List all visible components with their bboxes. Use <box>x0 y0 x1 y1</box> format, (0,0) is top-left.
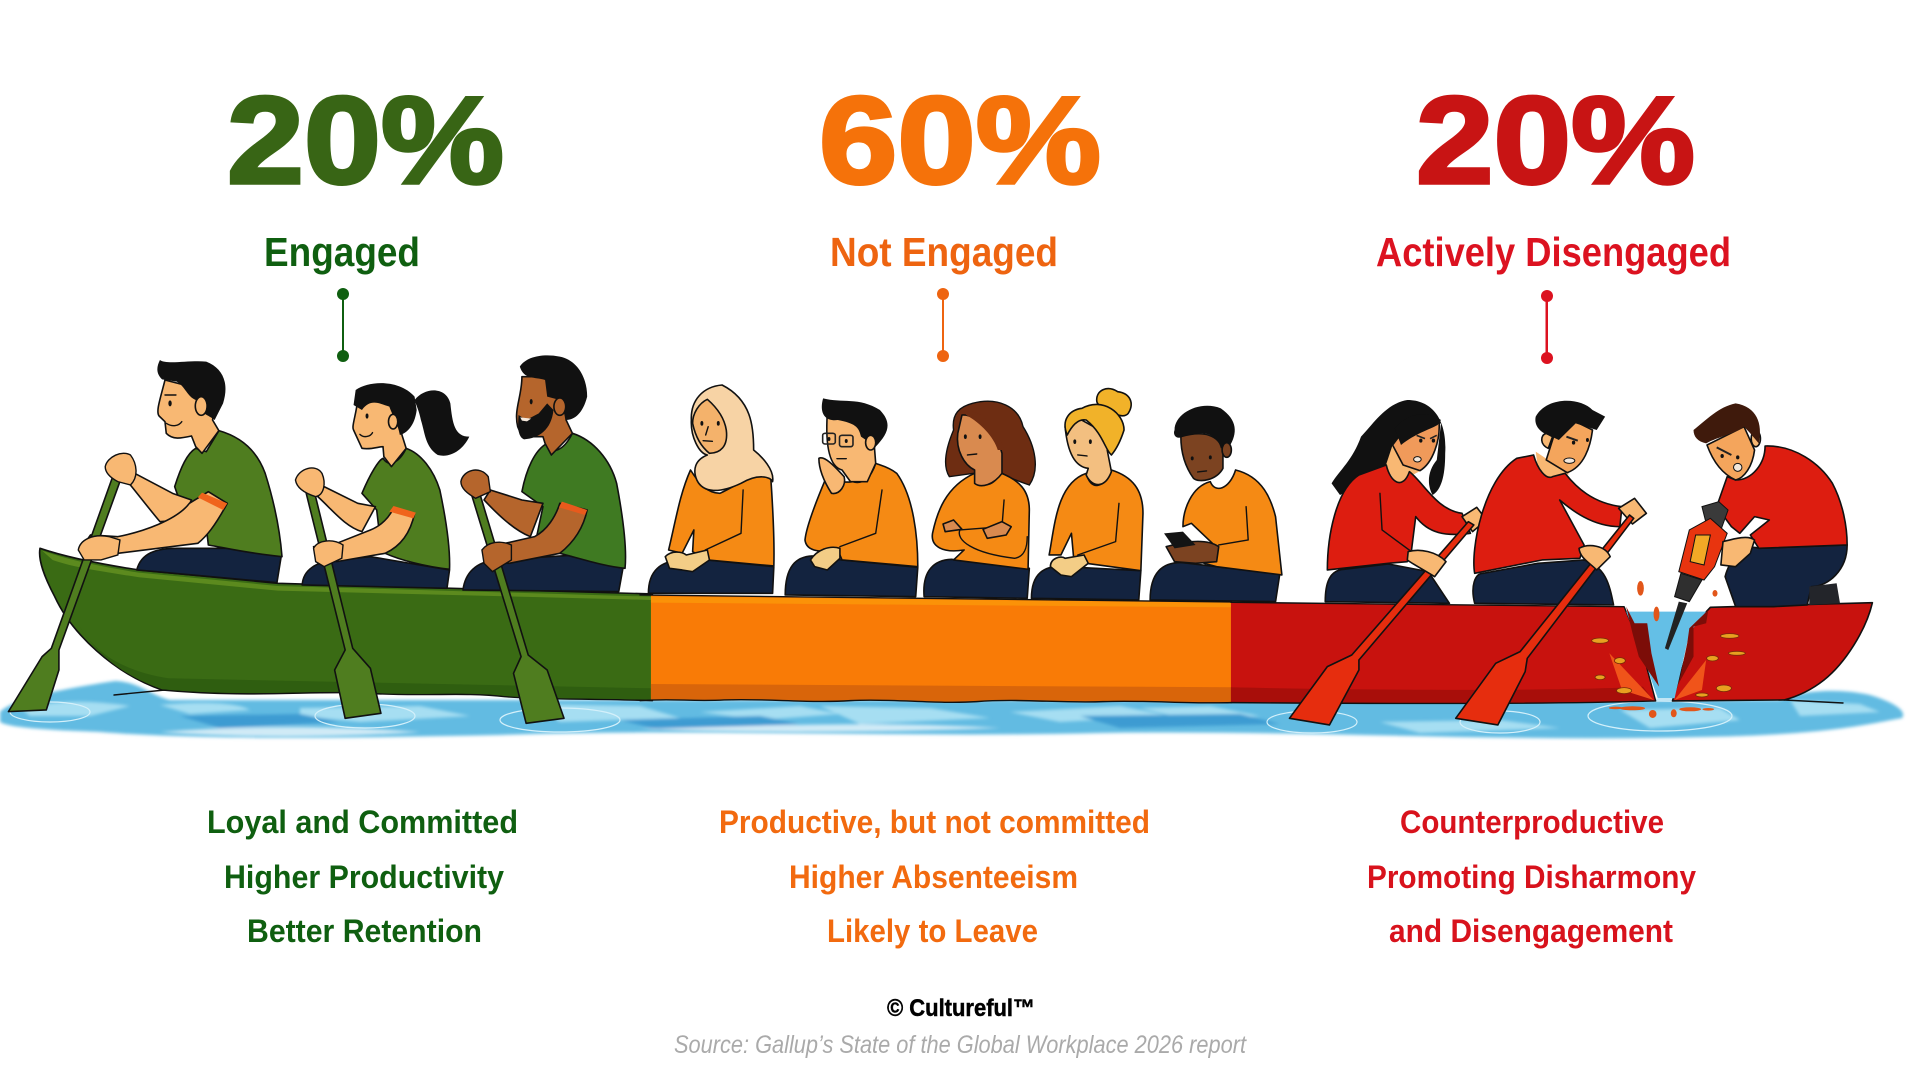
rower 3: engaged bearded man <box>463 355 626 592</box>
drill <box>1665 502 1728 650</box>
brand mark: © Cultureful™ <box>887 995 1035 1022</box>
text block: engaged traits: Higher Productivity <box>224 859 504 895</box>
person: woman in hijab, not engaged <box>648 385 774 593</box>
person: woman with curly hair, arms crossed, not engaged <box>924 401 1035 598</box>
text block: not engaged traits: Higher Absenteeism <box>789 859 1078 895</box>
red oars <box>1289 515 1634 725</box>
source note: Source: Gallup’s State of the Global Workplace 2026 report <box>674 1031 1247 1059</box>
stat: 60% not engaged: 60% <box>819 72 1101 210</box>
text block: engaged traits <box>207 804 518 949</box>
text block: not engaged traits: Likely to Leave <box>827 913 1038 949</box>
heading: Engaged: Engaged <box>264 229 420 275</box>
heading: Actively Disengaged: Actively Disengaged <box>1376 229 1731 275</box>
water <box>0 681 1903 738</box>
green oars <box>8 453 564 723</box>
connector: not engaged <box>937 288 949 362</box>
boat hull: not engaged orange section <box>640 595 1231 703</box>
person: blonde woman with bun, not engaged <box>1031 389 1143 600</box>
text block: actively disengaged traits: and Disengagement <box>1389 913 1673 949</box>
text block: actively disengaged traits <box>1367 804 1696 949</box>
crack splash <box>1626 612 1706 698</box>
rower 1: engaged man <box>80 360 282 583</box>
person: woman with red shirt, actively disengaged <box>1325 400 1486 603</box>
person: man drilling a hole in the boat, actively disengaged <box>1665 403 1847 650</box>
person: angry man rowing, actively disengaged <box>1473 401 1646 605</box>
stat: 20% engaged: 20% <box>227 72 504 210</box>
person: man looking at phone, not engaged <box>1150 406 1282 602</box>
person: man with glasses, not engaged <box>785 398 918 597</box>
heading: Not Engaged: Not Engaged <box>830 229 1058 275</box>
connector: engaged <box>337 288 349 362</box>
text block: not engaged traits <box>719 804 1150 949</box>
boat hull: actively disengaged red section with hole <box>1231 581 1872 718</box>
text block: actively disengaged traits: Counterproductive <box>1400 804 1664 840</box>
text block: engaged traits: Better Retention <box>247 913 482 949</box>
text block: engaged traits: Loyal and Committed <box>207 804 518 840</box>
boat hull: engaged green section <box>40 548 652 701</box>
stat: 20% actively disengaged: 20% <box>1416 72 1695 210</box>
rower 2: engaged woman with ponytail <box>302 383 469 588</box>
text block: not engaged traits: Productive, but not committed <box>719 804 1150 840</box>
connector: actively disengaged <box>1541 290 1553 364</box>
text block: actively disengaged traits: Promoting Disharmony <box>1367 859 1696 895</box>
